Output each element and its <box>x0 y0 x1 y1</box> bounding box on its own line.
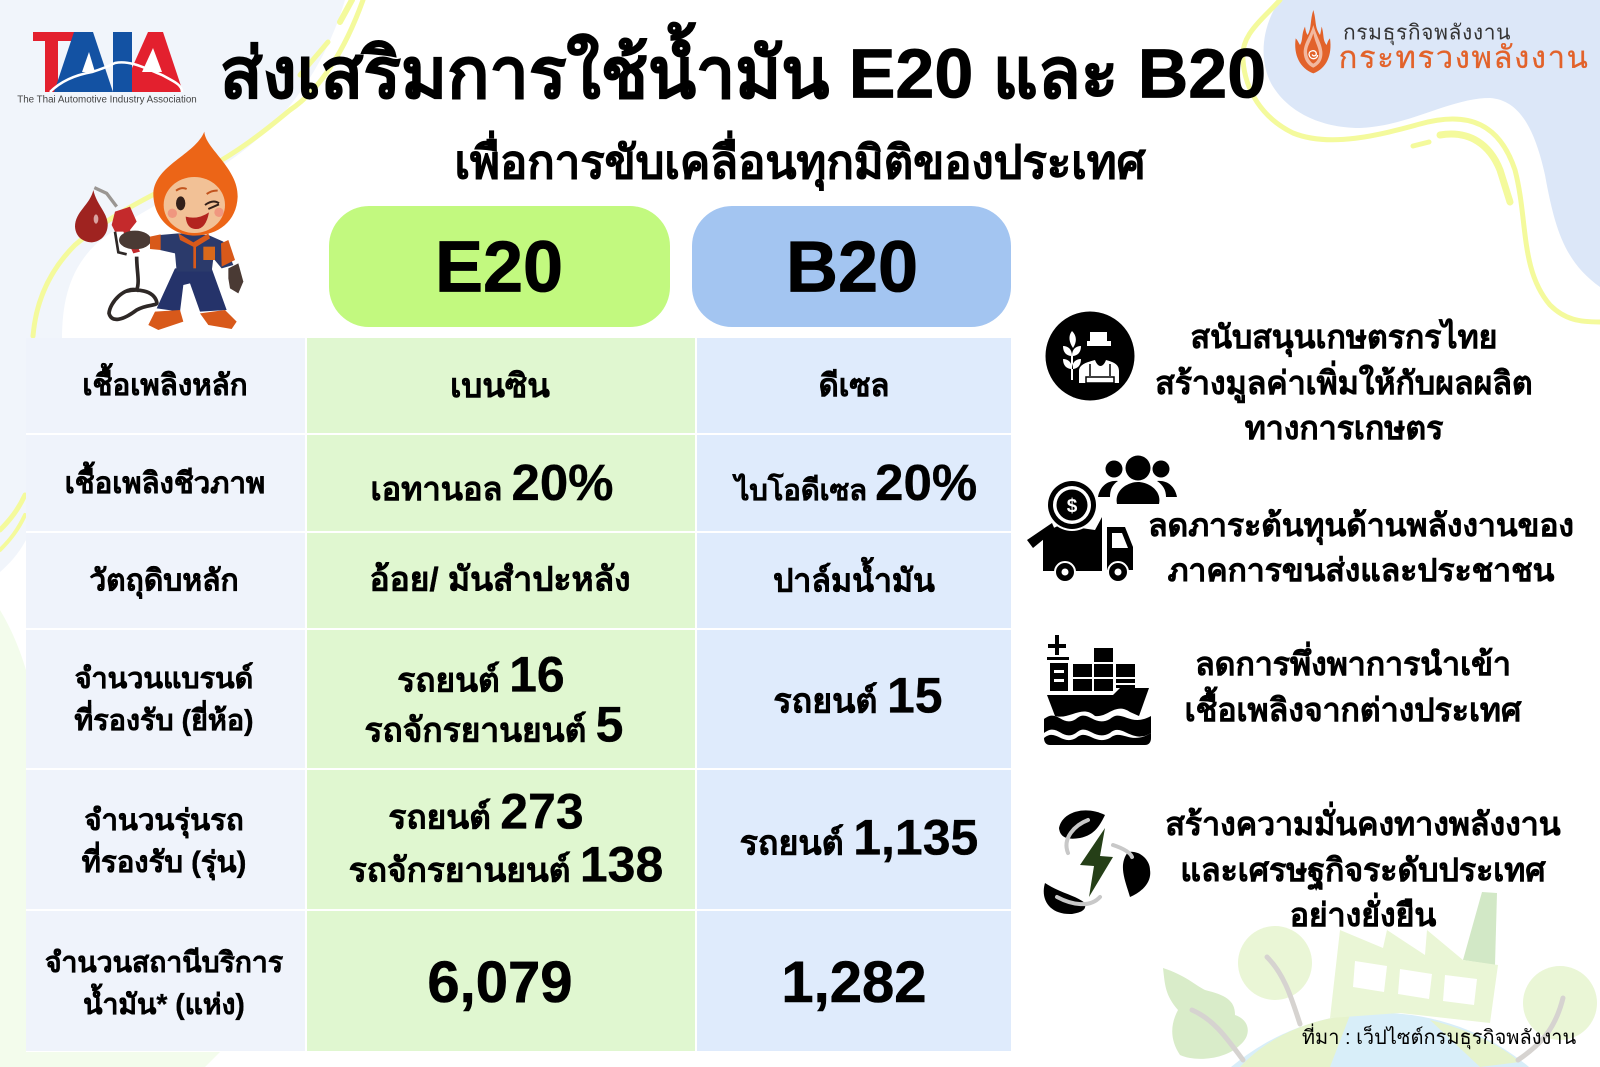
label: service stations: น้ำมัน* (แห่ง) <box>83 988 245 1020</box>
logo text: department: กรมธุรกิจพลังงาน <box>1343 21 1511 44</box>
row 2 B20 cell <box>697 435 1011 531</box>
B20 raw material: ปาล์มน้ำมัน <box>773 562 935 598</box>
B20 fuel: ดีเซล <box>819 368 889 403</box>
E20 models: รถยนต์ 273 <box>388 784 584 840</box>
row 5 label cell <box>26 770 305 909</box>
benefit 3 text <box>1185 641 1522 728</box>
row 2 E20 cell <box>307 435 695 531</box>
label: supported models: ที่รองรับ (รุ่น) <box>82 846 246 879</box>
label: supported models <box>82 804 246 880</box>
benefit 2 text: ลดภาระต้นทุนด้านพลังงานของ <box>1148 507 1574 543</box>
E20 biofuel: เอทานอล 20% <box>370 454 614 511</box>
logo: energy business department flame <box>1295 10 1330 74</box>
icon: farmer <box>1046 312 1134 400</box>
logo caption: The Thai Automotive Industry Association <box>17 95 197 106</box>
E20 fuel: เบนซิน <box>450 367 550 404</box>
label: service stations: จำนวนสถานีบริการ <box>45 946 283 978</box>
row 5 B20 cell <box>697 770 1011 909</box>
row 3 B20 cell <box>697 533 1011 628</box>
icon: leaves and energy bolt <box>1044 810 1150 914</box>
benefit 1 text <box>1155 318 1533 446</box>
benefit 1 text: สนับสนุนเกษตรกรไทย <box>1191 319 1497 355</box>
E20 brands: รถยนต์ 16 <box>397 646 565 702</box>
B20 models: รถยนต์ 1,135 <box>740 810 978 866</box>
header label: E20: E20 <box>435 227 563 307</box>
row 5 E20 cell <box>307 770 695 909</box>
E20 stations: 6,079 <box>427 950 573 1015</box>
icon: truck, magnifier and people <box>1027 456 1177 581</box>
row 2 label cell <box>26 435 305 531</box>
B20 brands: รถยนต์ 15 <box>773 668 943 724</box>
row 6 B20 cell <box>697 911 1011 1051</box>
mascot <box>75 132 244 330</box>
row 4 E20 cell <box>307 630 695 768</box>
E20 motorcycle brands: รถจักรยานยนต์ 5 <box>365 696 623 752</box>
row 4 B20 cell <box>697 630 1011 768</box>
logo: TAIA <box>33 32 183 92</box>
benefit 4 text: สร้างความมั่นคงทางพลังงาน <box>1165 806 1561 842</box>
E20 motorcycle models: รถจักรยานยนต์ 138 <box>349 836 663 892</box>
benefit 3 text: ลดการพึ่งพาการนำเข้า <box>1195 646 1511 682</box>
subtitle: เพื่อการขับเคลื่อนทุกมิติของประเทศ <box>455 137 1145 188</box>
row 3 E20 cell <box>307 533 695 628</box>
benefit 1 text: สร้างมูลค่าเพิ่มให้กับผลผลิต <box>1155 364 1533 400</box>
label: raw material: วัตถุดิบหลัก <box>89 564 239 598</box>
source note: ที่มา : เว็ปไซต์กรมธุรกิจพลังงาน <box>1302 1027 1576 1049</box>
row 4 label cell <box>26 630 305 768</box>
logo text: ministry: กระทรวงพลังงาน <box>1339 40 1589 75</box>
row 1 E20 cell <box>307 338 695 433</box>
E20 raw material: อ้อย/ มันสำปะหลัง <box>370 562 630 599</box>
benefit 2 text: ภาคการขนส่งและประชาชน <box>1168 552 1554 588</box>
benefit 2 text <box>1148 507 1574 588</box>
label: supported brands: จำนวนแบรนด์ <box>75 663 253 695</box>
label: supported brands: ที่รองรับ (ยี่ห้อ) <box>74 705 254 737</box>
benefit 1 text: ทางการเกษตร <box>1245 410 1443 446</box>
row 6 E20 cell <box>307 911 695 1051</box>
row 3 label cell <box>26 533 305 628</box>
B20 biofuel: ไบโอดีเซล 20% <box>735 454 977 511</box>
header: B20 <box>692 206 1011 327</box>
label: service stations <box>45 946 284 1020</box>
label: supported models: จำนวนรุ่นรถ <box>84 804 244 837</box>
title: ส่งเสริมการใช้น้ำมัน E20 และ B20 <box>220 34 1266 112</box>
benefit 4 text: อย่างยั่งยืน <box>1290 897 1436 933</box>
benefit 3 text: เชื้อเพลิงจากต่างประเทศ <box>1185 692 1521 728</box>
icon: cargo ship <box>1044 635 1151 745</box>
icon: truck, magnifier and people: $ <box>1067 496 1078 517</box>
label: biofuel: เชื้อเพลิงชีวภาพ <box>65 467 265 500</box>
label: main fuel: เชื้อเพลิงหลัก <box>82 369 248 402</box>
row 6 label cell <box>26 911 305 1051</box>
benefit 4 text: และเศรษฐกิจระดับประเทศ <box>1180 851 1546 887</box>
row 1 B20 cell <box>697 338 1011 433</box>
row 1 label cell <box>26 338 305 433</box>
table <box>26 338 1011 1051</box>
header label: B20: B20 <box>786 227 918 307</box>
benefit 4 text <box>1165 801 1561 933</box>
label: supported brands <box>74 662 254 737</box>
B20 stations: 1,282 <box>781 950 927 1015</box>
header: E20 <box>329 206 670 327</box>
